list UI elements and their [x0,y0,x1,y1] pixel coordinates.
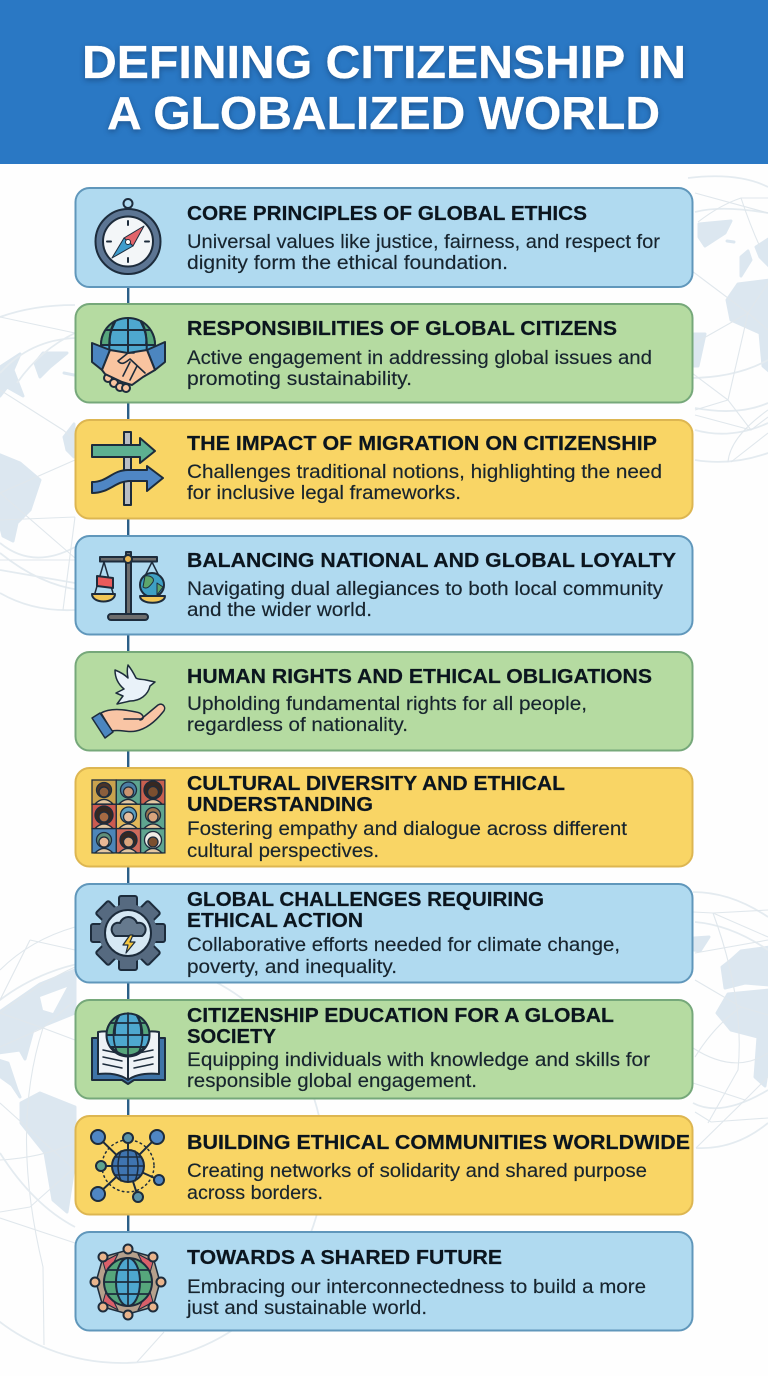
icon: globe and handshake [92,318,165,392]
card 10: shared future [76,1232,692,1330]
card 8: citizenship education [76,1000,692,1098]
description: Equipping individuals with knowledge and skills for [187,1049,651,1071]
heading: TOWARDS A SHARED FUTURE [187,1246,502,1269]
description: responsible global engagement. [187,1070,477,1092]
description: Creating networks of solidarity and shared purpose [187,1160,647,1182]
heading [187,888,544,932]
description [186,1276,646,1319]
icon: dove over open hand [92,665,165,738]
icon: network around globe [91,1130,164,1202]
description [187,461,662,504]
header band [0,0,768,164]
description: and the wider world. [187,599,372,621]
icon: compass [96,199,160,274]
icon: globe ringed by people [90,1244,166,1320]
description: dignity form the ethical foundation. [187,252,508,274]
heading: CULTURAL DIVERSITY AND ETHICAL [187,772,565,795]
description: across borders. [187,1182,323,1204]
description [187,347,652,390]
heading: BUILDING ETHICAL COMMUNITIES WORLDWIDE [187,1131,690,1154]
description: Upholding fundamental rights for all people, [187,693,587,715]
timeline connector [127,188,129,1232]
heading: CORE PRINCIPLES OF GLOBAL ETHICS [187,202,587,225]
icon: grid of diverse faces [92,780,165,853]
description: Challenges traditional notions, highlighting the need [187,461,662,483]
icon: crossing arrows on a signpost [92,432,163,505]
description: regardless of nationality. [187,714,408,736]
card 6: cultural diversity [76,768,692,866]
description [187,1160,647,1204]
card 3: migration [76,420,692,518]
description [187,934,620,978]
description: poverty, and inequality. [187,956,397,978]
heading: SOCIETY [187,1025,276,1048]
card 9: ethical communities [76,1116,692,1214]
description: Collaborative efforts needed for climate change, [187,934,620,956]
icon: balance scales [92,552,165,620]
title [82,36,686,139]
heading: THE IMPACT OF MIGRATION ON CITIZENSHIP [187,432,657,455]
description: Active engagement in addressing global issues and [187,347,652,369]
description [187,818,628,862]
heading: UNDERSTANDING [187,793,373,816]
heading [187,1004,614,1048]
icon: globe over open book [92,1013,165,1084]
card 2: responsibilities [76,304,692,402]
heading: BALANCING NATIONAL AND GLOBAL LOYALTY [187,549,676,572]
description: promoting sustainability. [187,368,412,390]
description: cultural perspectives. [187,840,379,862]
description [187,693,587,736]
card 4: loyalty [76,536,692,634]
description: just and sustainable world. [186,1297,427,1319]
description: Embracing our interconnectedness to build a more [187,1276,646,1298]
description: Universal values like justice, fairness, and respect for [187,231,661,253]
title: A GLOBALIZED WORLD [107,87,660,139]
description [187,1049,651,1092]
description: Fostering empathy and dialogue across different [187,818,628,840]
description: Navigating dual allegiances to both local community [187,578,663,600]
heading: HUMAN RIGHTS AND ETHICAL OBLIGATIONS [187,665,652,688]
description [187,578,663,621]
description [187,231,661,274]
heading: CITIZENSHIP EDUCATION FOR A GLOBAL [187,1004,614,1027]
heading [187,772,565,816]
heading: RESPONSIBILITIES OF GLOBAL CITIZENS [187,317,617,340]
heading: ETHICAL ACTION [187,909,363,932]
card 7: global challenges [76,884,692,982]
title: DEFINING CITIZENSHIP IN [82,36,686,88]
description: for inclusive legal frameworks. [187,482,461,504]
card 1: core principles [76,188,692,287]
card 5: human rights [76,652,692,750]
icon: gear with storm cloud [91,896,165,970]
heading: GLOBAL CHALLENGES REQUIRING [187,888,544,911]
